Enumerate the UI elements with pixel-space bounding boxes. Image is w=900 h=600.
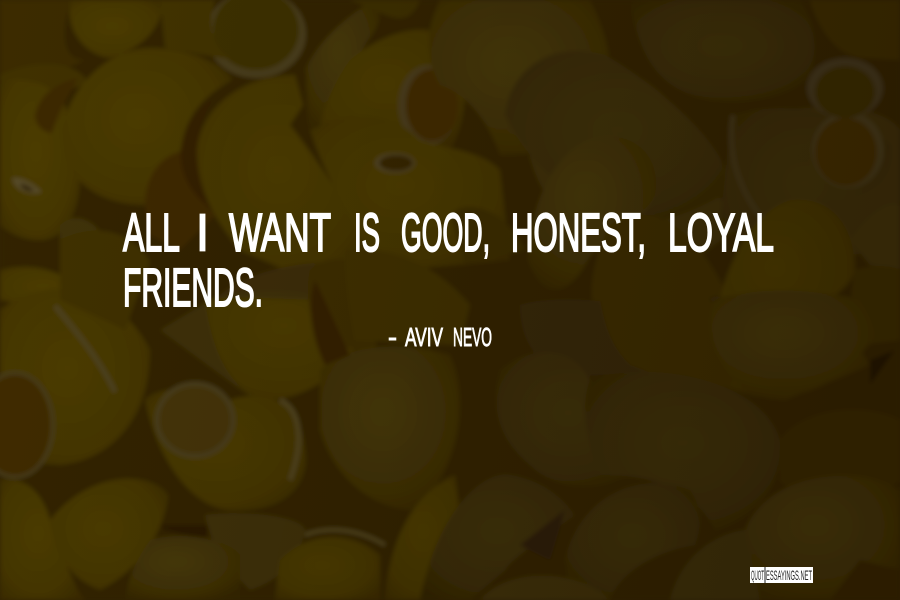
quote bbox=[123, 203, 774, 318]
top right of left half bbox=[306, 0, 380, 130]
quote line 1: GOOD, bbox=[401, 203, 490, 263]
quote line 1 bbox=[123, 203, 774, 263]
right lower bbox=[695, 294, 870, 400]
watermark bbox=[750, 567, 813, 583]
ring top center bbox=[206, 0, 306, 78]
author attribution: - bbox=[388, 322, 397, 352]
watermark: QUOT bbox=[751, 567, 764, 583]
top-left quadrant bbox=[0, 0, 85, 80]
quote line 1: LOYAL bbox=[668, 203, 774, 263]
quote line 1: HONEST, bbox=[511, 203, 646, 263]
center band bbox=[210, 262, 355, 350]
author attribution: AVIV bbox=[405, 322, 443, 352]
author attribution bbox=[388, 322, 492, 352]
quote line 2: FRIENDS. bbox=[123, 258, 263, 318]
quote line 1: I bbox=[195, 203, 210, 263]
quote line 1: ALL bbox=[123, 203, 180, 263]
infographic canvas: ESSAYINGS.NET bbox=[766, 567, 812, 583]
quote line 1: IS bbox=[354, 203, 380, 263]
quote line 1: WANT bbox=[229, 203, 331, 263]
author attribution: NEVO bbox=[453, 322, 492, 352]
center right bbox=[345, 249, 470, 345]
